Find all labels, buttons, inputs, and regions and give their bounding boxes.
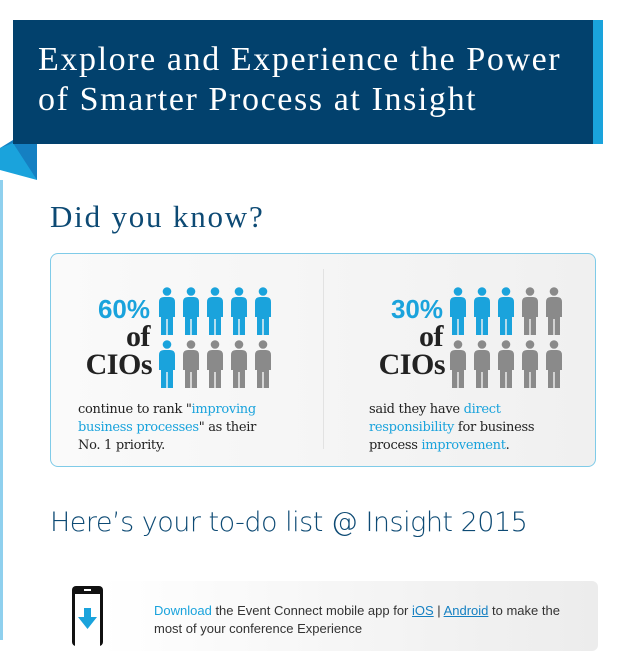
title: of Smarter Process at Insight	[38, 81, 477, 118]
icon: people grid 60%	[159, 287, 271, 388]
todo item: download app: most of your conference Experience	[154, 621, 362, 636]
stat: 30%: of	[419, 320, 443, 353]
stat: 30%: CIOs	[379, 348, 445, 381]
title	[38, 41, 561, 118]
stat: 30%: said they have direct	[369, 402, 501, 417]
stat: 60%: 60%	[98, 294, 150, 324]
heading: did you know: Did you know?	[50, 199, 265, 234]
icon: people grid 30%	[450, 287, 562, 388]
stat: 30%: responsibility for business	[369, 420, 534, 435]
stat: 60%: business processes" as their	[78, 420, 256, 435]
stat: 60%: No. 1 priority.	[78, 438, 165, 453]
stat: 60%: CIOs	[86, 348, 152, 381]
panel: stats	[50, 253, 596, 467]
icon: phone download	[72, 586, 103, 646]
stat: 60%: continue to rank "improving	[78, 402, 256, 417]
stat: 30%: 30%	[391, 294, 443, 324]
todo item: download app: Download the Event Connect mobile app for iOS | Android to make the	[154, 603, 560, 618]
heading: to-do list: Here’s your to-do list @ Insight 2015	[50, 507, 527, 538]
stat: 60%: of	[126, 320, 150, 353]
stat: 30%: process improvement.	[369, 438, 509, 453]
title: Explore and Experience the Power	[38, 41, 561, 78]
decoration: left ribbon	[0, 140, 37, 180]
stat: 60%	[78, 287, 271, 453]
header banner	[13, 20, 603, 144]
todo item: download app	[100, 581, 598, 651]
stat: 30%	[369, 287, 562, 453]
